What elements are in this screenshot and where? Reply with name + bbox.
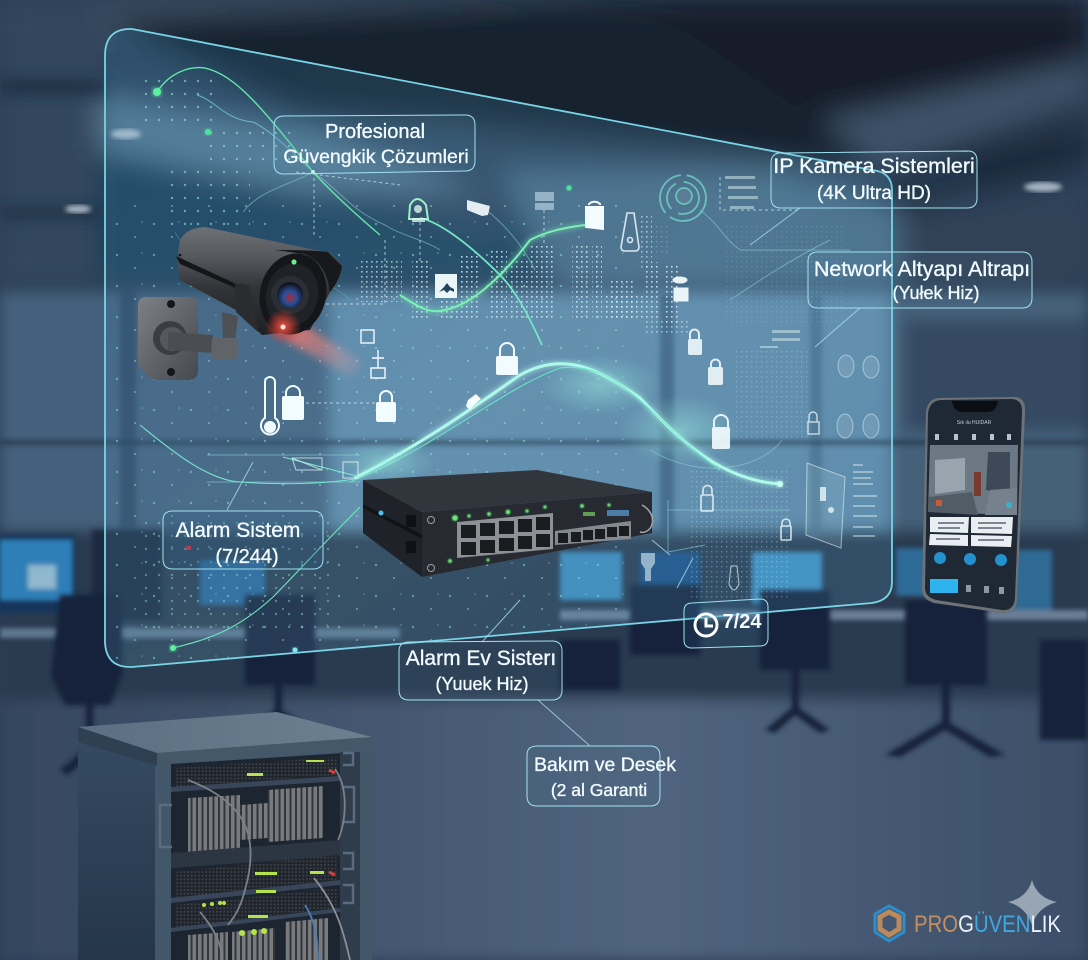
icon: blueprint document bbox=[806, 463, 845, 548]
dashed data lines bbox=[296, 172, 800, 403]
switch side bbox=[363, 480, 422, 577]
callout: Profesional Güvenlik Çözümleri: Güvengkik Çözumleri bbox=[283, 146, 469, 168]
phone camera feed bbox=[928, 445, 1018, 515]
icon: service tiles bbox=[837, 355, 879, 438]
callout: Bakım ve Destek bbox=[527, 746, 676, 806]
icons: distant security glyphs bbox=[292, 175, 879, 590]
icon: radar dial bbox=[660, 175, 706, 221]
callout: Alarm Sistem: (7/244) bbox=[215, 546, 279, 568]
wall mount bbox=[138, 297, 198, 380]
camera face bbox=[251, 246, 335, 342]
callout: IP Kamera Sistemleri: (4K Ultra HD) bbox=[817, 183, 931, 204]
small port block bbox=[555, 521, 631, 545]
logo: PROGÜVENLİK bbox=[875, 880, 1061, 941]
icon: terminal bbox=[343, 462, 358, 478]
server unit 2 bbox=[175, 855, 338, 898]
callout: Alarm Sistem bbox=[163, 511, 323, 569]
icon: padlock outline bbox=[781, 519, 791, 540]
icon: padlock outline bbox=[701, 486, 713, 511]
icon: robot glyph bbox=[641, 553, 655, 581]
callout: IP Kamera Sistemleri bbox=[771, 151, 977, 208]
callout: Alarm Sistem: Alarm Sistem bbox=[176, 519, 300, 542]
phone info tiles bbox=[929, 517, 1013, 547]
switch bbox=[363, 470, 653, 577]
icon: bottom key bbox=[729, 566, 739, 590]
icon: padlock bbox=[377, 391, 395, 421]
icon: status text list bbox=[725, 176, 800, 348]
phone buttons bbox=[934, 552, 1007, 566]
icons: padlocks on the glass bbox=[261, 202, 819, 540]
callout: Profesional Güvenlik Çözümleri bbox=[274, 115, 475, 174]
callout: Network Altyapı bbox=[808, 252, 1032, 308]
server unit 3 bbox=[175, 888, 338, 928]
callout connector lines bbox=[227, 208, 860, 746]
callout: Bakım ve Destek: (2 al Garanti bbox=[551, 780, 647, 800]
icon: upload box bbox=[361, 330, 385, 378]
rack top bbox=[78, 712, 372, 753]
icon: padlock outline bbox=[808, 412, 819, 434]
status LEDs bbox=[448, 503, 611, 563]
rack side bbox=[78, 742, 155, 960]
red camera beam bbox=[285, 322, 362, 378]
icon: stacked document bbox=[535, 192, 554, 210]
callout: 7/24 clock badge: 7/24 bbox=[723, 611, 762, 633]
icon: padlock bbox=[689, 330, 701, 354]
camera body bbox=[178, 227, 342, 335]
callout: Alarm Ev Sistemi bbox=[399, 641, 562, 700]
flowing signal lines bbox=[140, 68, 780, 648]
icon: padlock bbox=[497, 343, 517, 374]
ethernet port block bbox=[457, 513, 553, 558]
callout: 7/24 clock badge bbox=[684, 599, 768, 648]
icon: envelope bbox=[292, 458, 322, 470]
fine circuit lines bbox=[207, 172, 850, 552]
LEDs bbox=[202, 760, 324, 936]
patch cables bbox=[188, 769, 350, 960]
icon: thermometer bbox=[261, 377, 279, 434]
callout: Alarm Ev Sistemi: Alarm Ev Sisterı bbox=[406, 647, 556, 670]
icon: small padlock bbox=[673, 277, 688, 301]
camera hood bbox=[275, 250, 342, 292]
dot matrices bbox=[135, 72, 845, 630]
icon: document text bbox=[853, 464, 877, 537]
server unit 1 bbox=[175, 757, 338, 787]
icon: padlock bbox=[713, 415, 729, 448]
icon: padlock bbox=[283, 386, 303, 419]
rack handles bbox=[160, 753, 354, 903]
panel border bbox=[105, 29, 892, 667]
callout: Network Altyapı: Network Altyapı Altrapı bbox=[814, 257, 1030, 281]
icon: plug bbox=[466, 394, 481, 410]
switch front bbox=[422, 492, 652, 577]
icon: chart tile bbox=[435, 274, 457, 298]
lower cables bbox=[188, 932, 228, 960]
chairs bbox=[51, 585, 1088, 778]
icon: camera glyph bbox=[467, 200, 490, 216]
icon: padlock on skyline bbox=[586, 202, 603, 229]
icon: user badge bbox=[409, 199, 428, 222]
panel: holographic glass screen bbox=[105, 29, 892, 667]
logo sparkle bbox=[1008, 880, 1057, 925]
callout: Profesional Güvenlik Çözümleri: Profesional bbox=[325, 121, 425, 143]
callout: Bakım ve Destek: Bakım ve Desek bbox=[534, 754, 676, 776]
camera bbox=[138, 227, 342, 380]
cable drum bbox=[188, 795, 240, 853]
callout: IP Kamera Sistemleri: IP Kamera Sistemleri bbox=[773, 154, 975, 178]
network nodes bbox=[153, 88, 783, 652]
logo hexagon mark bbox=[875, 906, 904, 941]
icon: padlock bbox=[709, 360, 722, 384]
callout: Network Altyapı: (Yułek Hiz) bbox=[892, 283, 980, 303]
phone bbox=[922, 397, 1025, 613]
phone: Sık ılu HUIDAR bbox=[957, 420, 992, 426]
logo wordmark: PROGÜVENLIK bbox=[914, 911, 1061, 938]
server rack bbox=[78, 712, 372, 960]
chart: dotted city skyline bbox=[412, 244, 680, 323]
icon: key tag bbox=[621, 213, 639, 251]
callout: Alarm Ev Sistemi: (Yuuek Hiz) bbox=[435, 674, 529, 694]
switch top bbox=[363, 470, 652, 512]
